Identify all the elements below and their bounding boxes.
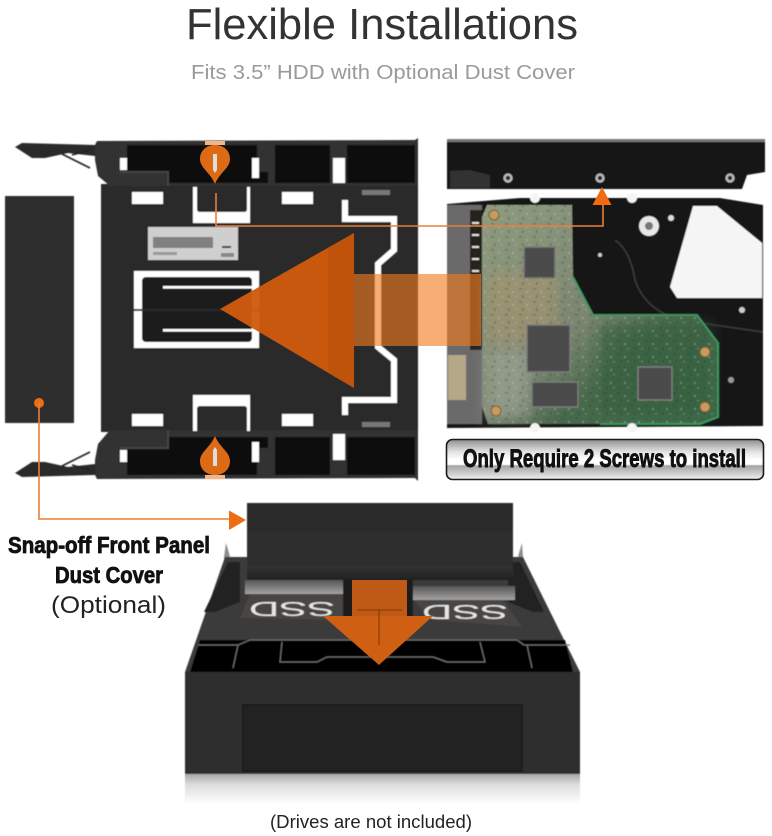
icon: top screw marker [200, 141, 230, 184]
tray bottom rail [95, 430, 418, 481]
big insertion arrow [220, 233, 481, 388]
chips [524, 247, 672, 407]
callout: snap-off front panel: (Optional) [51, 592, 166, 619]
top cutouts [193, 187, 250, 223]
spindle [639, 216, 659, 236]
title: Flexible Installations [186, 0, 578, 49]
screw connector line and arrow [216, 187, 612, 226]
left top arm [15, 143, 95, 158]
rail cutouts [120, 158, 345, 462]
left top arm struts [62, 150, 90, 168]
arrow shaft [354, 274, 481, 346]
board screws [489, 210, 710, 416]
panel: hard disk drive [447, 139, 765, 433]
front face [185, 672, 580, 774]
reflection [185, 774, 580, 804]
hdd side bar [447, 139, 765, 189]
footnote: (Drives are not included) [270, 812, 472, 832]
right ssd: SSD [422, 600, 508, 622]
label sticker [148, 227, 238, 260]
circuit board [482, 205, 718, 424]
hdd mount holes [505, 175, 733, 181]
hdd body grooves [615, 240, 763, 332]
tray top rail [95, 138, 418, 186]
bottom cutouts [193, 395, 250, 431]
dust cover panel [5, 196, 74, 423]
tray body [101, 184, 418, 432]
arrow head [220, 233, 354, 388]
panels under cover [245, 580, 343, 594]
down arrow [323, 580, 433, 665]
rail inner recesses [127, 145, 415, 475]
left bottom arm [15, 462, 95, 477]
side cutout outline [345, 200, 394, 415]
callout: snap-off front panel [8, 532, 210, 619]
left ssd: SSD [249, 597, 335, 619]
hdd white window [670, 206, 762, 298]
bay deck [185, 557, 580, 672]
left bottom arm struts [62, 452, 90, 470]
front recess [243, 705, 522, 771]
middle connector [343, 580, 413, 620]
icon: bottom screw marker [200, 436, 230, 479]
rail brackets [120, 172, 168, 448]
callout: snap-off front panel: Snap-off Front Panel [8, 532, 210, 558]
dust cover connector line and arrow [34, 398, 246, 530]
left ssd [240, 594, 345, 620]
mounting ears [224, 543, 524, 570]
dust cover on bay [247, 503, 513, 580]
subtitle: Fits 3.5” HDD with Optional Dust Cover [191, 62, 575, 84]
board tone patches [486, 272, 710, 418]
panel: assembled bay with dust cover [185, 503, 580, 804]
hdd body [447, 198, 763, 428]
body screw notches [530, 193, 637, 433]
callout: snap-off front panel: Dust Cover [55, 562, 163, 588]
panel: drive tray top view [15, 138, 418, 481]
button: only require 2 screws [446, 440, 764, 480]
front vents [190, 640, 573, 672]
centre window [134, 271, 259, 348]
right ssd [413, 600, 522, 627]
hdd connector block [447, 205, 482, 424]
